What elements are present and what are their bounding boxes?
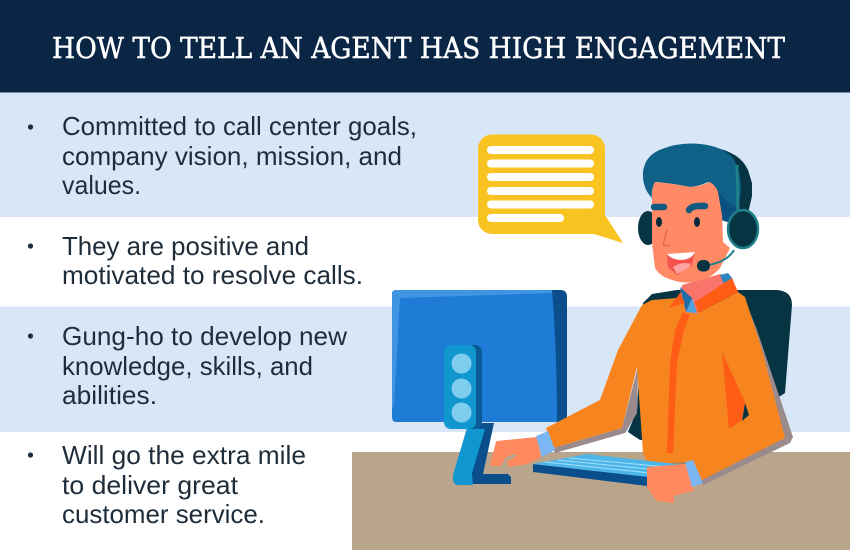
text: item 3: abilities. [62, 380, 157, 410]
text: item 3: Gung-ho to develop new [62, 321, 347, 351]
panel: item 4 [0, 432, 352, 550]
panel: item 1 [0, 92, 850, 217]
right cuff [685, 460, 703, 487]
monitor button panel [444, 345, 482, 429]
left ear muff [638, 211, 658, 245]
collar [669, 278, 738, 313]
neck and shirt [680, 273, 733, 314]
speech bubble [478, 134, 623, 243]
left cuff [536, 431, 555, 457]
text: item 4: Will go the extra mile [62, 440, 306, 470]
agent [491, 144, 793, 502]
text: item 1: Committed to call center goals, [62, 111, 417, 141]
text: item 4: customer service. [62, 499, 265, 529]
text: item 1 [62, 111, 417, 200]
text: item 1: company vision, mission, and [62, 141, 402, 171]
bullet 4 [28, 452, 33, 458]
nose [663, 230, 670, 246]
eyes [656, 217, 700, 227]
text: item 1: values. [62, 170, 141, 200]
text: item 2 [62, 231, 363, 290]
armpit fold [722, 352, 745, 429]
desk [352, 452, 850, 550]
left hand [491, 438, 540, 466]
panel: item 3 [0, 306, 850, 432]
chair [628, 290, 792, 440]
keyboard [533, 454, 685, 486]
text: item 3 [62, 321, 347, 410]
desk shadow [642, 453, 700, 466]
bullet 1 [28, 124, 33, 130]
right ear muff [728, 210, 758, 248]
eyebrows [654, 206, 705, 210]
text: item 2: They are positive and [62, 231, 309, 261]
face [652, 182, 730, 282]
microphone [697, 250, 734, 272]
jacket [546, 292, 785, 480]
header banner [0, 0, 850, 92]
right hand [648, 465, 693, 502]
hair [643, 144, 741, 222]
bullet 2 [28, 243, 33, 249]
text: item 2: motivated to resolve calls. [62, 260, 363, 290]
headset strap [737, 165, 738, 212]
monitor stand [453, 423, 511, 485]
title: HOW TO TELL AN AGENT HAS HIGH ENGAGEMENT [52, 31, 786, 65]
monitor [392, 290, 567, 485]
jacket zipper [667, 312, 690, 453]
text: item 4 [62, 440, 306, 529]
bullet 3 [28, 333, 33, 339]
headset band [712, 147, 752, 218]
text: item 3: knowledge, skills, and [62, 351, 313, 381]
text: item 4: to deliver great [62, 470, 239, 500]
monitor screen [392, 290, 567, 422]
mouth [667, 252, 695, 275]
panel: item 2 [0, 217, 850, 306]
body grey shadow [690, 300, 793, 485]
